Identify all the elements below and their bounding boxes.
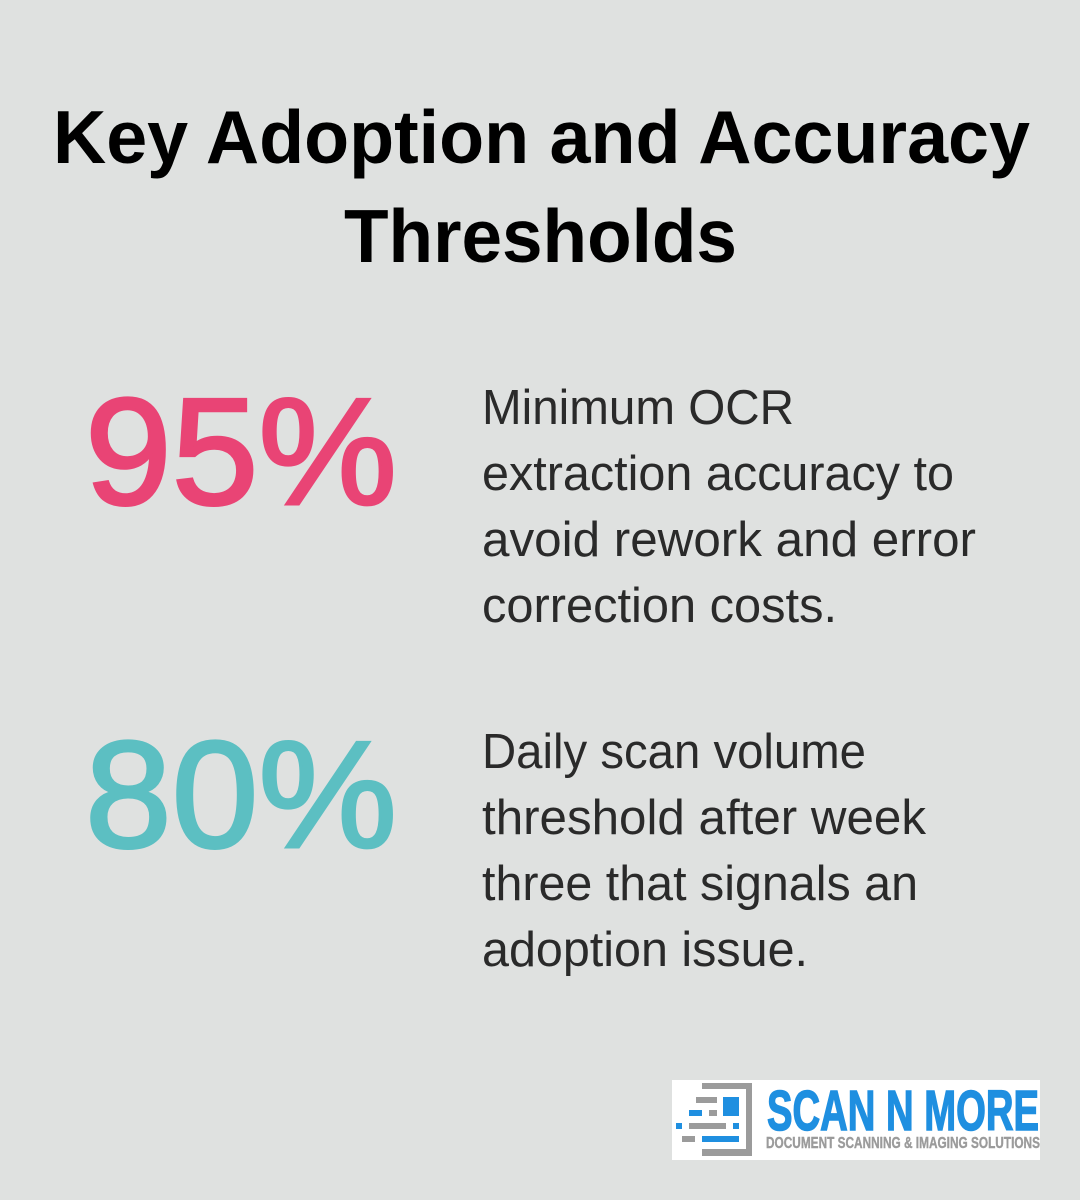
logo icon: scanner frame and blocks — [676, 1083, 752, 1156]
description: OCR accuracy: avoid rework and error — [482, 513, 976, 567]
description: OCR accuracy: Minimum OCR — [482, 381, 794, 435]
logo — [672, 1079, 1040, 1160]
title: Thresholds — [344, 194, 737, 278]
description: OCR accuracy: correction costs. — [482, 579, 837, 633]
description: scan volume: three that signals an — [482, 857, 918, 911]
description: scan volume — [482, 725, 926, 977]
description: scan volume: adoption issue. — [482, 923, 808, 977]
description: scan volume: threshold after week — [482, 791, 926, 845]
description: OCR accuracy — [482, 381, 976, 633]
title: Key Adoption and Accuracy — [53, 95, 1030, 179]
title — [53, 95, 1030, 278]
description: OCR accuracy: extraction accuracy to — [482, 447, 954, 501]
description: scan volume: Daily scan volume — [482, 725, 866, 779]
stat: 80%: 80% — [85, 710, 397, 880]
stat: 95%: 95% — [85, 367, 397, 537]
